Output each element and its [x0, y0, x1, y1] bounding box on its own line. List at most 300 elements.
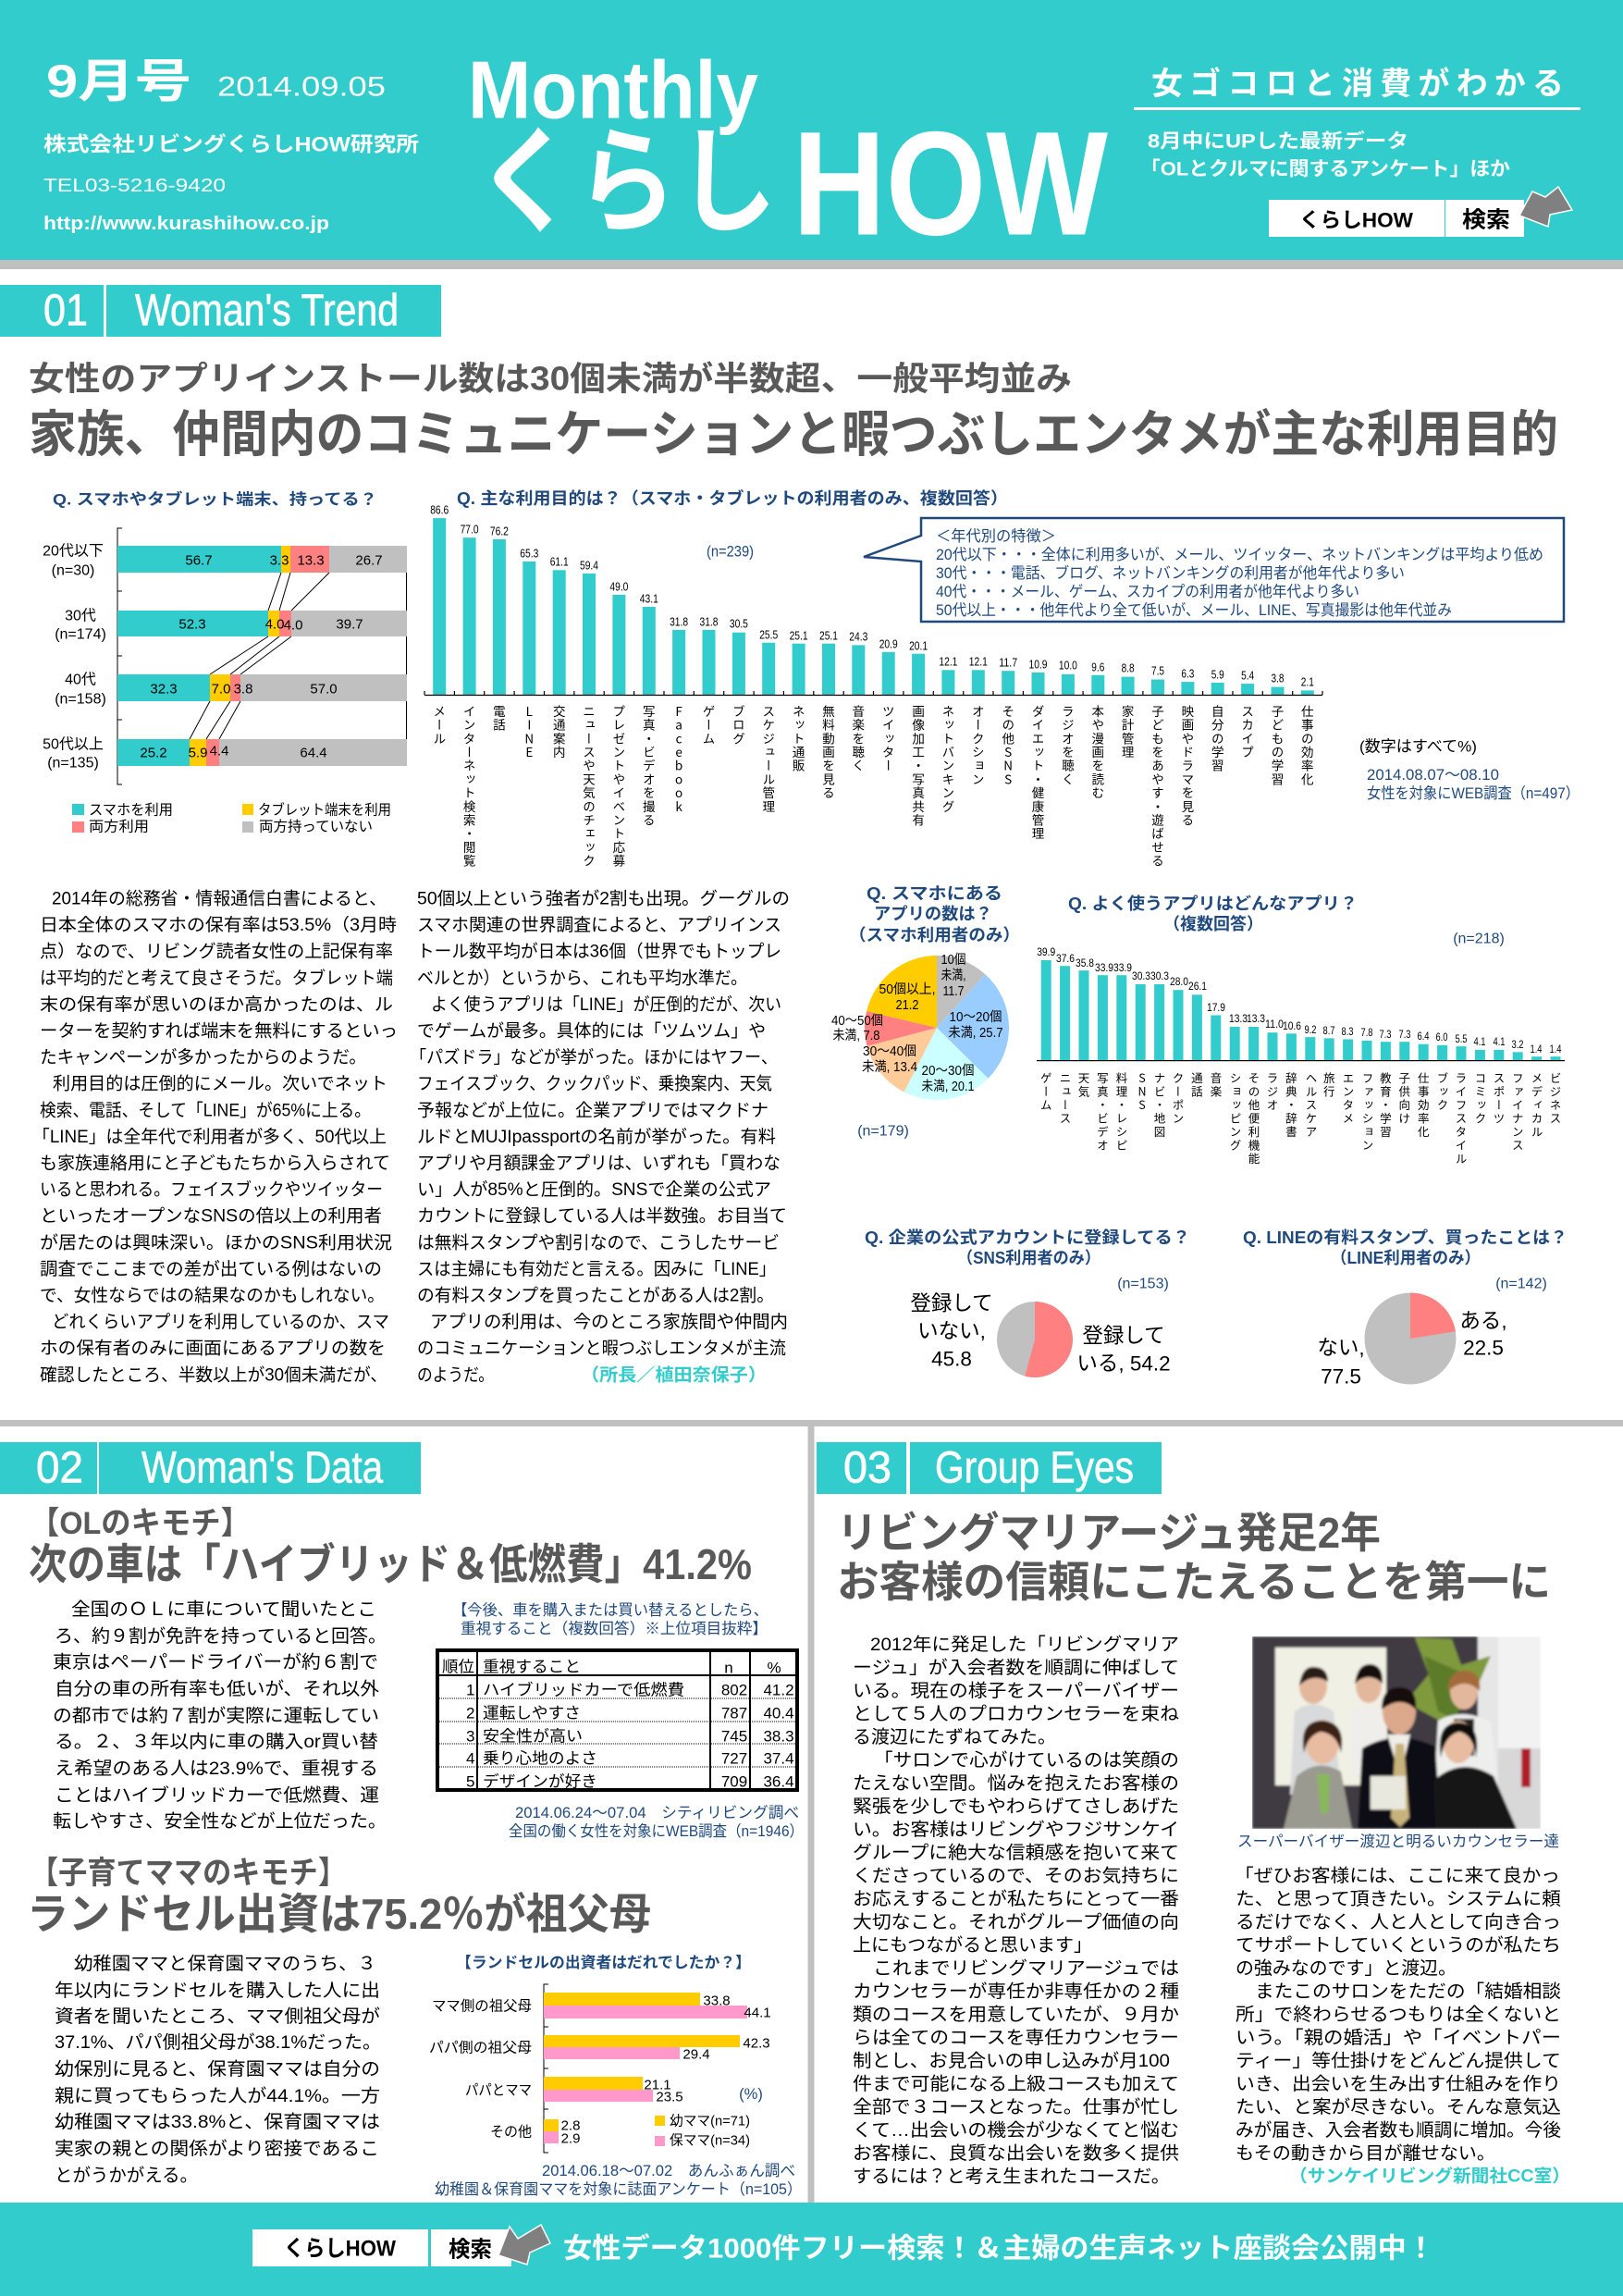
- section tab 03: Group Eyes: [935, 1443, 1134, 1493]
- group article text column 2: た、と思って頂きたい。システムに頼: [1236, 1889, 1562, 1909]
- category labels: その他便利機能: [1245, 1072, 1263, 1166]
- table header: n: [724, 1660, 733, 1676]
- bar values: 25.5: [759, 627, 778, 642]
- table caption: 【今後、車を購入または買い替えるとしたら、: [452, 1601, 768, 1619]
- article text column 2: アプリの利用は、今のところ家族間や仲間内: [430, 1312, 788, 1332]
- bar values: 11.0: [1265, 1018, 1284, 1031]
- search box: [252, 2229, 511, 2266]
- bar values: 11.7: [999, 655, 1017, 670]
- bar values: 9.2: [1304, 1023, 1317, 1036]
- category labels: 写真・ビデオ: [1094, 1072, 1112, 1153]
- pie labels: 50個以上,: [879, 981, 936, 997]
- chart: number of apps pie: (n=179): [857, 1123, 909, 1140]
- search box: [1269, 200, 1524, 237]
- group article text column 2: の強みなのです」と渡辺。: [1236, 1958, 1457, 1979]
- survey note: [1359, 738, 1580, 802]
- group article text column 1: る渡辺にたずねてみた。: [853, 1727, 1056, 1747]
- article text column 2: い」人が85%と圧倒的。SNSで企業の公式ア: [417, 1179, 771, 1200]
- table rows: 802: [721, 1682, 747, 1698]
- bar values: 33.9: [1113, 961, 1132, 974]
- article text column 1: ホの保有者のみに画面にあるアプリの数を: [40, 1339, 386, 1359]
- bars: [433, 518, 1314, 695]
- issue date: 2014.09.05: [217, 72, 386, 102]
- bar values: 30.5: [730, 616, 748, 631]
- bar values: [430, 503, 1314, 688]
- table rows: 運転しやすさ: [483, 1704, 581, 1722]
- group article text column 1: くださっているので、そのお気持ちに: [853, 1866, 1179, 1886]
- author credit: （サンケイリビング新聞社CC室）: [1289, 2165, 1570, 2187]
- table rows: 37.4: [763, 1750, 794, 1767]
- table rows: 709: [721, 1772, 747, 1791]
- bar values: 25.1: [819, 629, 838, 642]
- article text column 2: 50個以上という強者が2割も出現。グーグルの: [417, 888, 790, 908]
- bar values: 31.8: [699, 614, 718, 629]
- group article text column 2: みが届き、入会者数も順調に増加。今後: [1236, 2120, 1561, 2141]
- category labels: 仕事効率化: [1415, 1072, 1432, 1140]
- bar values: 30.3: [1132, 969, 1150, 982]
- row 30s: 52.3: [178, 616, 206, 633]
- mama article text: [55, 1954, 381, 2186]
- row labels: [43, 542, 106, 772]
- bar values: 7.3: [1398, 1028, 1411, 1041]
- front row women: [1284, 1720, 1517, 1829]
- author credit: （所長／植田奈保子）: [581, 1364, 767, 1385]
- table rows: 36.4: [763, 1772, 794, 1791]
- article text column 1: は平均的だと考えて良さそうだ。タブレット端: [40, 967, 393, 988]
- group article text column 1: 大切なこと。それがグループ価値の向: [853, 1912, 1179, 1932]
- category labels: 子どもをあやす・遊ばせる: [1149, 705, 1167, 868]
- bar values: 86.6: [430, 503, 449, 516]
- article text column 2: ベルとか）というから、これも平均水準だ。: [417, 968, 747, 988]
- bar values: 76.2: [490, 524, 509, 538]
- group article text column 2: たい、と案が尽きない。そんな意気込: [1236, 2097, 1561, 2117]
- table rows: 2: [466, 1704, 474, 1722]
- icon: search arrow: [1519, 187, 1572, 227]
- row 20s: [117, 546, 407, 573]
- chart: randoseru payer bars: (%): [739, 2086, 763, 2103]
- legend: タブレット端末を利用: [258, 801, 391, 818]
- header note: 8月中にUPした最新データ: [1148, 130, 1408, 152]
- bar values: 77.0: [461, 522, 479, 537]
- OL article text: ろ、約９割が免許を持っていると回答。: [55, 1626, 387, 1647]
- headline 01: 女性のアプリインストール数は30個未満が半数超、一般平均並み: [29, 359, 1072, 398]
- car priorities table: [437, 1650, 797, 1791]
- category labels: ナビ・地図: [1150, 1072, 1169, 1140]
- pie labels: 10～20個: [949, 1009, 1002, 1025]
- bar values: 31.8: [670, 614, 688, 629]
- group article text column 2: ティー」等仕掛けをどんどん提供して: [1236, 2051, 1561, 2071]
- category labels: メール: [430, 705, 449, 746]
- category labels: 料理・レシピ: [1113, 1072, 1130, 1153]
- chart: device ownership stacked bars: [43, 490, 407, 834]
- legend: 両方持っていない: [259, 818, 373, 834]
- group article text column 2: いう。「親の婚活」や「イベントパー: [1236, 2028, 1561, 2048]
- header banner: [0, 0, 1623, 269]
- article text column 1: 末の保有率が思いのほか高かったのは、ル: [40, 994, 393, 1015]
- mama headline: [27, 1856, 651, 1938]
- icon: search arrow: [498, 2225, 550, 2265]
- article text column 2: アプリや月額課金アプリは、いずれも「買わな: [417, 1153, 781, 1173]
- row 50s: 5.9: [189, 746, 207, 760]
- legend: 保ママ(n=34): [670, 2133, 750, 2148]
- mama article text: 37.1%、パパ側祖父母が38.1%だった。: [55, 2032, 381, 2053]
- bar values: 2.9: [561, 2131, 580, 2146]
- category labels: 本や漫画を読む: [1088, 705, 1107, 800]
- pie labels: 20～30個: [921, 1063, 975, 1079]
- category labels: ライフスタイル: [1452, 1072, 1470, 1166]
- row 20s: 26.7: [355, 553, 383, 568]
- row 20s: 3.3: [270, 553, 289, 568]
- table rows: 1: [466, 1682, 474, 1698]
- table rows: 745: [721, 1728, 747, 1745]
- mama article text: 年以内にランドセルを購入した人に出: [55, 1981, 380, 2001]
- category labels: SNS: [1134, 1072, 1150, 1112]
- bar values: 7.3: [1380, 1028, 1392, 1041]
- footer banner: [0, 2203, 1623, 2296]
- search box: くらしHOW: [284, 2237, 396, 2261]
- table rows: [466, 1680, 794, 1791]
- chart: number of apps pie: アプリの数は？: [874, 905, 992, 923]
- pie labels: [910, 1291, 1171, 1375]
- bar values: 35.8: [1076, 957, 1094, 969]
- section tab 03: 03: [843, 1443, 891, 1493]
- category labels: ヘルスケア: [1302, 1072, 1321, 1140]
- table caption: 重視すること（複数回答）※上位項目抜粋】: [461, 1620, 768, 1637]
- category labels: 天気: [1075, 1072, 1093, 1099]
- header note: 「OLとクルマに関するアンケート」ほか: [1140, 159, 1510, 179]
- bar values: 10.9: [1028, 657, 1047, 672]
- chart: LINE stamps pie: Q. LINEの有料スタンプ、買ったことは？: [1243, 1228, 1568, 1247]
- chart: official account pie: (n=153): [1117, 1277, 1169, 1291]
- category labels: 映画やドラマを見る: [1178, 705, 1197, 827]
- row labels: (n=174): [55, 627, 106, 642]
- category labels: スポーツ: [1491, 1072, 1507, 1126]
- article text column 2: でゲームが最多。具体的には「ツムツム」や: [417, 1021, 766, 1042]
- table rows: 727: [721, 1750, 747, 1767]
- bar values: 26.1: [1188, 980, 1207, 993]
- category labels: 教育・学習: [1377, 1071, 1395, 1140]
- bar values: 13.3: [1229, 1012, 1248, 1025]
- header note: [1140, 130, 1510, 179]
- table header: [442, 1658, 781, 1676]
- telephone: TEL03-5216-9420: [43, 176, 226, 196]
- section tab 02: [0, 1442, 421, 1494]
- table header: %: [767, 1660, 781, 1676]
- row 30s: 39.7: [336, 616, 363, 633]
- article text column 2: のコミュニケーションと暇つぶしエンタメが主流: [417, 1339, 786, 1359]
- group article text column 2: もその動きから目が離せない。: [1236, 2143, 1495, 2164]
- bar values: 37.6: [1056, 952, 1075, 965]
- category labels: 音楽を聴く: [849, 704, 867, 773]
- article text column 2: [410, 888, 790, 1385]
- row labels: 50代以上: [43, 736, 104, 753]
- bar values: 3.8: [1271, 672, 1284, 685]
- category labels: ニュース: [1056, 1072, 1075, 1126]
- row 20s: 13.3: [297, 553, 325, 568]
- bar values: 20.9: [879, 636, 898, 651]
- article text column 1: 点）なので、リビング読者女性の上記保有率: [40, 942, 393, 962]
- website: http://www.kurashihow.co.jp: [43, 214, 329, 234]
- group article text column 1: するには？と考え生まれたコースだ。: [853, 2166, 1170, 2187]
- bar values: 5.4: [1241, 668, 1254, 683]
- bar values: 8.3: [1341, 1025, 1354, 1038]
- chart: randoseru payer bars: [429, 1954, 771, 2153]
- bar values: 6.3: [1181, 666, 1194, 681]
- survey note: 女性を対象にWEB調査（n=497）: [1367, 784, 1580, 802]
- pie labels: 登録して: [910, 1291, 993, 1315]
- chart: number of apps pie: （スマホ利用者のみ）: [849, 926, 1020, 944]
- bar values: [1037, 945, 1562, 1055]
- chart source: 2014.06.18～07.02 あんふぁん調べ: [542, 2162, 795, 2179]
- bar values: 5.5: [1456, 1032, 1468, 1045]
- headline 01: [29, 359, 1558, 463]
- article text column 2: カウントに登録している人は半数強。お目当て: [417, 1206, 787, 1227]
- pie labels: 40～50個: [831, 1013, 883, 1029]
- category labels: クーポン: [1169, 1072, 1187, 1126]
- article text column 1: 「LINE」は全年代で利用者が多く、50代以上: [32, 1127, 387, 1147]
- chart: LINE stamps pie: (n=142): [1495, 1277, 1547, 1291]
- bar values: 13.3: [1247, 1012, 1265, 1025]
- row 40s: [117, 674, 407, 701]
- row 40s: 57.0: [310, 681, 338, 697]
- chart: main purposes bar chart: Q. 主な利用目的は？（スマホ・タブレットの利用者のみ、複数回答）: [457, 488, 1008, 508]
- table caption: [452, 1601, 768, 1637]
- category labels: スケジュール管理: [759, 705, 778, 814]
- pie labels: 未満, 7.8: [832, 1028, 880, 1043]
- article text column 1: どれくらいアプリを利用しているのか、スマ: [52, 1312, 389, 1332]
- group article text column 1: [853, 1635, 1179, 2187]
- group article text column 1: 類のコースを用意していたが、９月か: [853, 2005, 1179, 2025]
- category labels: [429, 1998, 532, 2141]
- OL headline: [29, 1506, 752, 1588]
- OL article text: 自分の車の所有率も低いが、それ以外: [55, 1679, 380, 1699]
- pie labels: 未満, 20.1: [921, 1079, 975, 1094]
- callout: characteristics by age: [864, 518, 1564, 622]
- table header: 順位: [442, 1658, 474, 1676]
- bar values: 5.9: [1211, 668, 1224, 681]
- mama headline: 【子育てママのキモチ】: [30, 1856, 347, 1891]
- article text column 1: 検索、電話、そして「LINE」が65%に上る。: [40, 1100, 371, 1120]
- chart: official account pie: Q. 企業の公式アカウントに登録してる？: [865, 1228, 1190, 1247]
- pie labels: 22.5: [1463, 1336, 1504, 1360]
- category labels: [1038, 1071, 1565, 1166]
- bar values: 6.0: [1435, 1031, 1448, 1043]
- row 50s: 25.2: [140, 746, 167, 760]
- article text column 1: 確認したところ、半数以上が30個未満だが、: [40, 1364, 387, 1385]
- bar values: 1.4: [1550, 1043, 1562, 1055]
- pie labels: 77.5: [1321, 1365, 1361, 1388]
- headline 03: お客様の信頼にこたえることを第一に: [837, 1558, 1551, 1606]
- table rows: 3: [466, 1728, 474, 1745]
- pie labels: ない,: [1317, 1336, 1365, 1360]
- bar values: 12.1: [939, 655, 957, 668]
- mama article text: 幼保別に見ると、保育園ママは自分の: [55, 2059, 380, 2080]
- chart: frequently used apps bars: Q. よく使うアプリはどんなアプリ？: [1068, 895, 1358, 913]
- category labels: パパ側の祖父母: [429, 2039, 532, 2055]
- bar values: [561, 1993, 771, 2146]
- pie labels: 未満, 25.7: [949, 1025, 1002, 1041]
- bar values: 39.9: [1037, 945, 1055, 958]
- category labels: エンタメ: [1339, 1072, 1358, 1126]
- bar values: 65.3: [520, 546, 538, 561]
- bar values: 8.7: [1322, 1024, 1335, 1037]
- table rows: 40.4: [763, 1704, 794, 1722]
- legend: [72, 801, 391, 834]
- survey note: (数字はすべて%): [1359, 738, 1477, 755]
- article text column 1: も家族連絡用にと子どもたちから入らされて: [40, 1153, 390, 1173]
- OL article text: の都市では約７割が実際に運転してい: [53, 1706, 379, 1726]
- bar values: 43.1: [640, 592, 658, 605]
- callout: characteristics by age: ＜年代別の特徴＞: [936, 527, 1056, 545]
- mama article text: 幼稚園ママは33.8%と、保育園ママは: [55, 2112, 380, 2132]
- group article text column 2: てサポートしていくというのが私たち: [1236, 1935, 1561, 1956]
- row 50s: 64.4: [300, 746, 327, 760]
- chart: frequently used apps bars: (n=218): [1453, 931, 1505, 947]
- article text column 1: で、女性ならではの結果なのかもしれない。: [40, 1286, 385, 1306]
- category labels: メディカル: [1528, 1072, 1546, 1140]
- category labels: ニュースや天気のチェック: [580, 705, 598, 868]
- pie labels: 登録して: [1082, 1325, 1165, 1347]
- category labels: インターネット検索・閲覧: [461, 705, 479, 868]
- callout: characteristics by age: 50代以上・・・他年代より全て低いが、メール、LINE、写真撮影は他年代並み: [936, 601, 1452, 619]
- pie labels: [1317, 1310, 1507, 1388]
- category labels: ビジネス: [1546, 1072, 1565, 1126]
- pie labels: 45.8: [931, 1347, 972, 1371]
- article text column 2: ルドとMUJIpassportの名前が挙がった。有料: [417, 1127, 776, 1147]
- category labels: ラジオを聴く: [1059, 705, 1077, 786]
- group article text column 1: ージュ」が入会者数を順調に伸ばして: [853, 1658, 1179, 1678]
- pie labels: いる, 54.2: [1076, 1352, 1171, 1375]
- table rows: 38.3: [763, 1728, 794, 1745]
- category labels: その他: [490, 2124, 532, 2141]
- OL article text: 転しやすさ、安全性などが上位だった。: [53, 1811, 387, 1832]
- chart: LINE stamps pie: （LINE利用者のみ）: [1331, 1249, 1481, 1267]
- bar values: 4.1: [1493, 1035, 1506, 1048]
- bars: [1041, 960, 1561, 1060]
- mama article text: 実家の親との関係がより密接であるこ: [55, 2139, 379, 2159]
- row 40s: 7.0: [212, 681, 230, 697]
- group article text column 1: いる。現在の様子をスーパーバイザー: [853, 1681, 1179, 1701]
- pie labels: 11.7: [943, 984, 964, 999]
- pie labels: 未満,: [941, 968, 965, 983]
- table rows: 4: [466, 1750, 474, 1767]
- group article text column 2: るだけでなく、人と人として向き合っ: [1236, 1912, 1561, 1932]
- group article text column 1: くて…出会いの機会が少なくてと悩む: [853, 2120, 1179, 2141]
- man in suit: [1358, 1687, 1441, 1829]
- category labels: コミック: [1472, 1072, 1489, 1126]
- bar values: 23.5: [656, 2089, 683, 2105]
- category labels: ブログ: [730, 705, 748, 746]
- article text column 2: フェイスブック、クックパッド、乗換案内、天気: [417, 1073, 772, 1094]
- article text column 2: 予報などが上位に。企業アプリではマクドナ: [417, 1100, 768, 1120]
- chart: number of apps pie: [831, 884, 1020, 1140]
- category labels: 辞典・辞書: [1283, 1072, 1300, 1140]
- category labels: プレゼントやイベント応募: [609, 705, 628, 868]
- bar values: 21.1: [644, 2078, 671, 2092]
- category labels: 仕事の効率化: [1298, 705, 1317, 786]
- table source: 2014.06.24～07.04 シティリビング調べ: [515, 1804, 799, 1821]
- headline 03: [837, 1509, 1551, 1606]
- bar values: 4.1: [1474, 1035, 1486, 1048]
- category labels: ファイナンス: [1509, 1072, 1527, 1153]
- row 50s: 4.4: [210, 744, 228, 759]
- masthead Monthly: Monthly: [468, 44, 758, 135]
- chart: official account pie: （SNS利用者のみ）: [957, 1249, 1100, 1267]
- bars: [544, 1993, 747, 2143]
- category labels: 音楽: [1208, 1072, 1224, 1099]
- OL headline: 【OLのキモチ】: [30, 1506, 251, 1541]
- group article text column 1: お応えすることが私たちにとって一番: [853, 1889, 1179, 1909]
- group article text column 1: 緊張を少しでもやわらげてさしあげた: [853, 1796, 1179, 1817]
- article text column 1: たキャンペーンが多かったからのようだ。: [40, 1047, 366, 1068]
- bar values: 28.0: [1170, 975, 1188, 988]
- pie labels: いない,: [917, 1319, 986, 1343]
- category labels: [430, 704, 1317, 868]
- group article text column 1: 制とし、お見合いの申し込みが月100: [853, 2051, 1170, 2071]
- table rows: 41.2: [763, 1682, 794, 1698]
- photo: supervisor and counselors: [1252, 1636, 1541, 1829]
- bar values: 44.1: [744, 2006, 771, 2020]
- category labels: 自分の学習: [1209, 705, 1227, 773]
- category labels: ツイッター: [879, 705, 898, 773]
- company name: 株式会社リビングくらしHOW研究所: [43, 133, 419, 155]
- category labels: ダイエット・健康管理: [1028, 705, 1047, 841]
- table rows: デザインが好き: [483, 1772, 597, 1791]
- group article text column 1: 「サロンで心がけているのは笑顔の: [874, 1750, 1179, 1771]
- chart: LINE stamps pie: [1243, 1228, 1568, 1388]
- group article text column 1: 2012年に発足した「リビングマリア: [870, 1635, 1179, 1655]
- bar values: 20.1: [909, 638, 928, 653]
- bar values: 2.8: [561, 2118, 580, 2133]
- category labels: 画像加工・写真共有: [909, 705, 928, 827]
- group article text column 2: [1235, 1866, 1570, 2187]
- chart: randoseru payer bars: 【ランドセルの出資者はだれでしたか？】: [456, 1954, 751, 1971]
- OL article text: [53, 1599, 387, 1832]
- category labels: ショッピング: [1226, 1072, 1245, 1153]
- bar values: 2.1: [1301, 675, 1314, 688]
- pie labels: 10個: [941, 952, 965, 968]
- bar values: 29.4: [682, 2046, 710, 2063]
- article text column 1: 2014年の総務省・情報通信白書によると、: [52, 888, 387, 908]
- category labels: ネット通販: [790, 705, 808, 773]
- row labels: 30代: [65, 607, 96, 623]
- section tab 02: Woman's Data: [141, 1443, 383, 1493]
- group article text column 1: たえない空間。悩みを抱えたお客様の: [853, 1773, 1179, 1794]
- chart source: [435, 2162, 802, 2198]
- group article text column 1: これまでリビングマリアージュでは: [873, 1958, 1179, 1979]
- footer message: 女性データ1000件フリー検索！＆主婦の生声ネット座談会公開中！: [563, 2233, 1435, 2265]
- OL article text: ことはハイブリッドカーで低燃費、運: [55, 1784, 379, 1806]
- bar values: 10.0: [1059, 659, 1077, 672]
- bar values: 12.1: [969, 655, 988, 668]
- article text column 1: といったオープンなSNSの倍以上の利用者: [40, 1206, 382, 1227]
- category labels: 子どもの学習: [1269, 705, 1287, 786]
- category labels: ネットバンキング: [939, 705, 957, 814]
- article text column 2: トール数平均が日本は36個（世界でもトップレ: [417, 942, 781, 962]
- OL headline: 次の車は「ハイブリッド＆低燃費」41.2%: [29, 1540, 752, 1588]
- category labels: ゲーム: [699, 705, 718, 746]
- row 30s: [117, 611, 407, 636]
- article text column 1: 利用目的は圧倒的にメール。次いでネット: [53, 1074, 387, 1094]
- row 30s: 4.0: [265, 616, 284, 633]
- category labels: スカイプ: [1238, 705, 1257, 759]
- category labels: 電話: [490, 705, 509, 732]
- row 30s: 4.0: [284, 618, 302, 633]
- back row people: [1290, 1664, 1500, 1799]
- article text column 2: スマホ関連の世界調査によると、アプリインス: [417, 915, 781, 935]
- chart: number of apps pie: Q. スマホにある: [867, 884, 1002, 903]
- chart: frequently used apps bars: （複数回答）: [1163, 914, 1263, 933]
